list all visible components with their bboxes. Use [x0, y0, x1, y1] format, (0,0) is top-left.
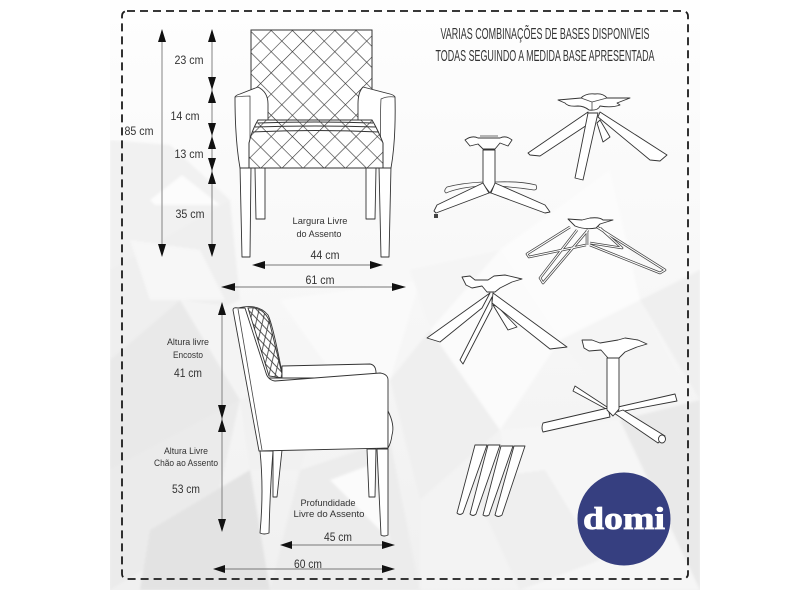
- front legs: [367, 449, 388, 536]
- base: cross pedestal: [542, 338, 677, 443]
- arm rest: [282, 364, 376, 378]
- base: four angled legs: [528, 94, 667, 180]
- seat width label: Largura Livre: [292, 216, 348, 227]
- arm inner edges: [235, 96, 395, 166]
- height dimension: 85 cm: 85 cm: [124, 124, 154, 138]
- seat width label: do Assento: [296, 229, 342, 240]
- logo: domi: [578, 472, 670, 566]
- side view chair: [233, 307, 393, 536]
- front legs: [240, 166, 391, 257]
- backrest height label: Encosto: [173, 350, 203, 361]
- depth dimension: 60 cm: [213, 557, 395, 573]
- seat depth label: Livre do Assento: [294, 509, 364, 520]
- quilted back: [238, 307, 283, 378]
- logo: domi: domi: [583, 500, 665, 536]
- height dimensions stack: 14 cm: [170, 109, 200, 123]
- width dimension: 44 cm: [252, 248, 383, 269]
- backrest height label: Altura livre: [167, 337, 209, 348]
- seat height label: 53 cm: [172, 482, 200, 496]
- rear legs: [260, 450, 282, 534]
- seat width label: [292, 216, 348, 240]
- background panel: [110, 0, 700, 590]
- depth dimension: 45 cm: 45 cm: [324, 530, 352, 544]
- depth dimension: 60 cm: 60 cm: [294, 557, 322, 571]
- base: wire frame: [527, 218, 665, 283]
- backrest height label: 41 cm: [174, 366, 202, 380]
- front view chair: [235, 30, 395, 257]
- seat bulge: [388, 411, 393, 448]
- back legs: [255, 168, 376, 219]
- backrest dimension: [218, 302, 226, 532]
- width dimension: 61 cm: 61 cm: [306, 273, 334, 287]
- height dimensions stack: [170, 29, 216, 257]
- height dimensions stack: 23 cm: [174, 53, 204, 67]
- height dimensions stack: 13 cm: [174, 147, 204, 161]
- dashed frame: [122, 11, 688, 579]
- right arm: [358, 87, 395, 168]
- seat depth label: [294, 498, 364, 520]
- heading: [436, 26, 655, 65]
- chair body: [233, 308, 388, 451]
- heading: TODAS SEGUINDO A MEDIDA BASE APRESENTADA: [436, 48, 655, 65]
- height dimension: 85 cm: [124, 29, 166, 257]
- width dimension: 44 cm: 44 cm: [310, 248, 340, 262]
- depth dimension: 45 cm: [280, 530, 395, 549]
- base: crossed angled legs: [427, 275, 567, 364]
- seat depth label: Profundidade: [300, 498, 356, 509]
- width dimension: 61 cm: [221, 273, 406, 291]
- heading: VARIAS COMBINAÇÕES DE BASES DISPONIVEIS: [440, 26, 650, 43]
- seat height label: [154, 446, 218, 496]
- left arm: [235, 87, 268, 168]
- quilted backrest: [251, 30, 372, 125]
- base: hairpin conical legs: [457, 445, 525, 516]
- seat height label: Chão ao Assento: [154, 458, 218, 469]
- seat height label: Altura Livre: [164, 446, 208, 457]
- back edge line: [238, 309, 262, 450]
- quilted seat: [249, 120, 383, 168]
- backrest height label: [167, 337, 209, 380]
- base: swivel four-star: [434, 136, 550, 218]
- height dimensions stack: 35 cm: [176, 207, 204, 221]
